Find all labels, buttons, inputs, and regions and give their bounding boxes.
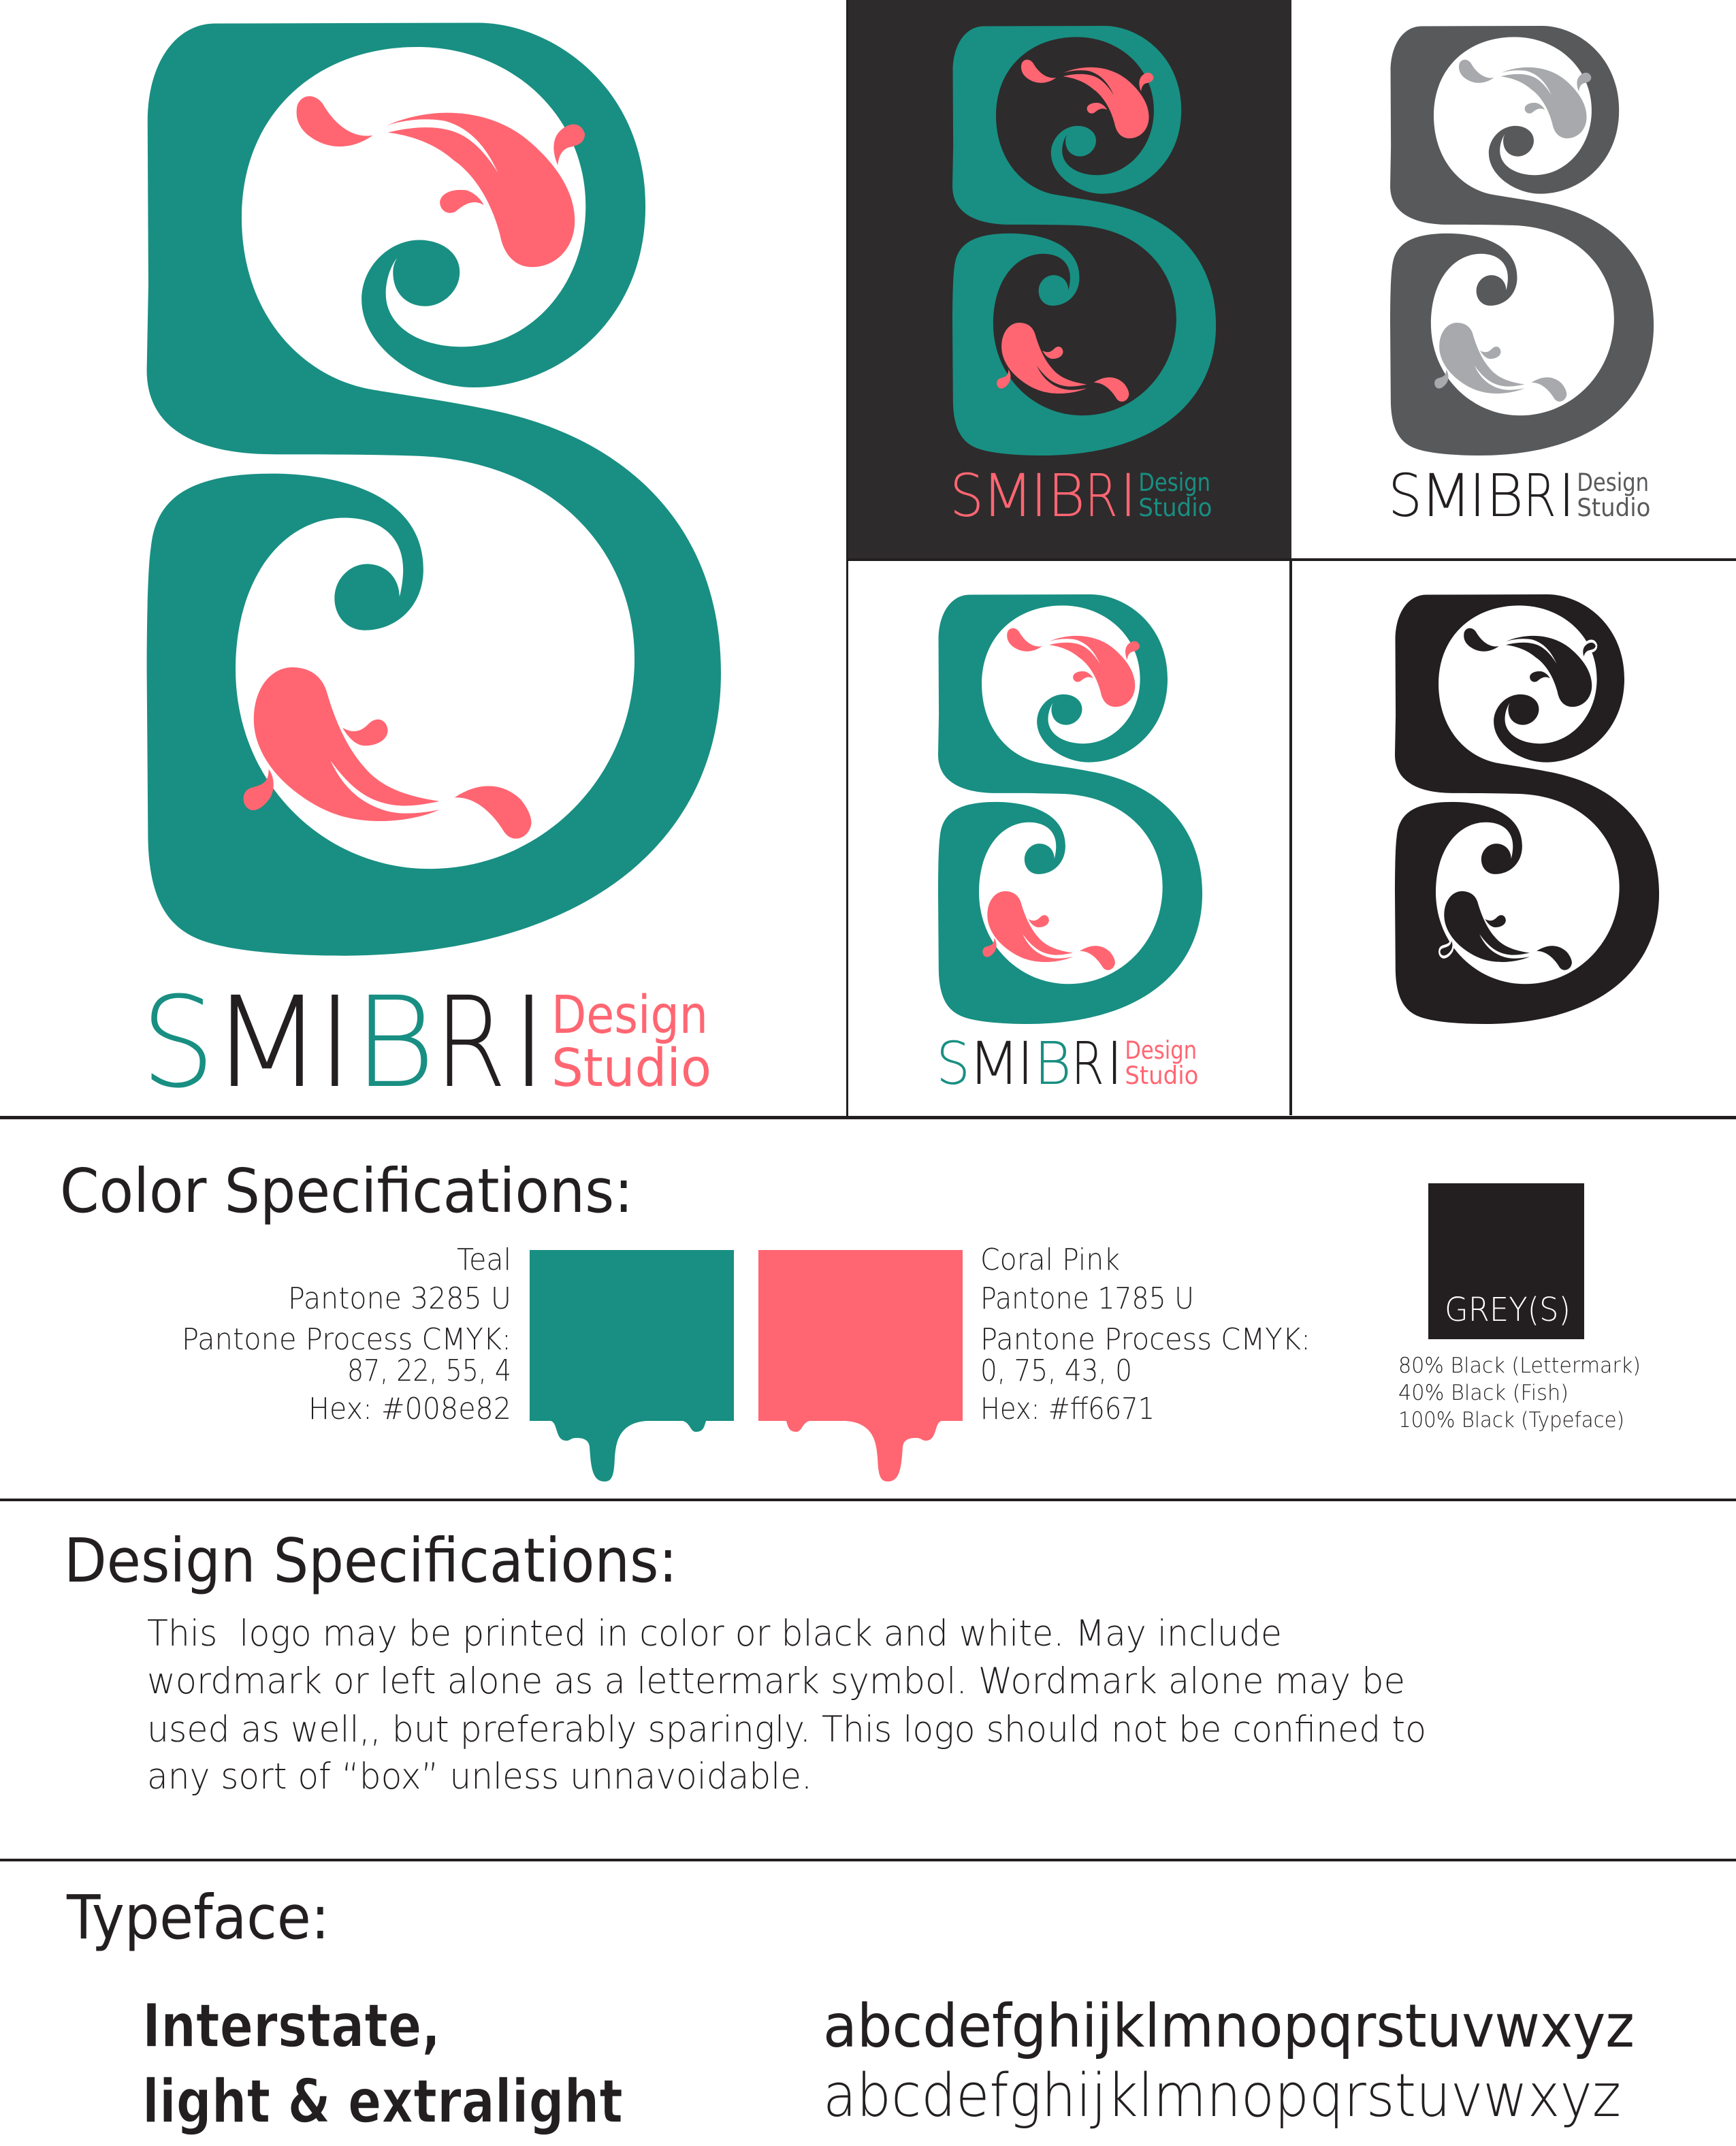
coral colour specification text: Pantone Process CMYK: [980,1322,1311,1357]
grey panel wordmark: Design [1577,469,1649,497]
grey swatch [1428,1183,1584,1339]
small teal wordmark: I [1106,1029,1123,1098]
small teal wordmark: M [967,1029,1020,1098]
alphabet samples: abcdefghijklmnopqrstuvwxyz [823,2061,1621,2130]
teal colour specification text: Hex: #008e82 [308,1392,511,1426]
panel: dark logo background [848,0,1291,560]
small teal wordmark [936,1029,1198,1098]
alphabet samples [823,1991,1635,2130]
small teal wordmark: S [936,1029,970,1098]
grey specification text: 80% Black (Lettermark) [1398,1354,1641,1378]
grey panel wordmark: B [1485,462,1524,530]
dark panel wordmark: I [1031,462,1047,530]
small teal wordmark: Studio [1125,1062,1198,1090]
heading: design specifications: Design Specifications: [64,1525,677,1596]
main wordmark: M [210,970,324,1116]
typeface name: Interstate, [142,1991,440,2061]
grey panel wordmark: I [1469,462,1485,530]
small teal wordmark: R [1071,1029,1104,1098]
grey swatch: GREY(S) [1445,1291,1571,1329]
coral colour specification text: 0, 75, 43, 0 [980,1354,1132,1388]
coral swatch with drips [758,1250,963,1482]
main teal and coral lettermark [147,22,721,956]
teal colour specification text [182,1243,511,1426]
dark panel wordmark: Studio [1138,494,1212,522]
grey panel wordmark: S [1388,462,1422,530]
main wordmark: R [434,970,507,1116]
main wordmark: Studio [551,1038,711,1099]
grey panel wordmark: I [1558,462,1575,530]
design specifications body text: wordmark or left alone as a lettermark symbol. Wordmark alone may be [147,1661,1405,1702]
dark panel wordmark [950,462,1212,530]
main wordmark: S [141,970,215,1116]
design specifications body text: This logo may be printed in color or black and white. May include [147,1613,1282,1654]
design specifications body text: used as well,, but preferably sparingly. This logo should not be confined to [147,1709,1426,1750]
coral colour specification text: Pantone 1785 U [980,1281,1194,1316]
grey panel wordmark: Studio [1577,494,1650,522]
main wordmark: Design [551,985,708,1046]
grey specification text [1398,1354,1641,1432]
dark panel wordmark: B [1047,462,1085,530]
small teal wordmark: I [1017,1029,1033,1098]
teal colour specification text: Teal [457,1243,511,1277]
grey lettermark [1390,26,1654,455]
dark panel lettermark [952,26,1216,455]
grey panel wordmark [1388,462,1650,530]
heading: typeface: Typeface: [66,1882,329,1953]
design specifications body text: any sort of “box” unless unnavoidable. [147,1756,812,1797]
main wordmark [141,970,711,1116]
coral colour specification text: Hex: #ff6671 [980,1392,1155,1426]
small teal wordmark: Design [1125,1037,1197,1065]
typeface name [142,1991,623,2136]
dark panel wordmark: R [1084,462,1118,530]
teal swatch with drips [530,1250,734,1482]
dark panel wordmark: S [950,462,984,530]
teal colour specification text: Pantone Process CMYK: [182,1322,511,1357]
grey panel wordmark: M [1419,462,1473,530]
grey panel wordmark: R [1523,462,1556,530]
dark panel wordmark: I [1120,462,1137,530]
main wordmark: I [317,970,353,1116]
heading: color specifications: Color Specifications: [60,1155,633,1226]
main wordmark: I [511,970,547,1116]
typeface name: light & extralight [142,2066,623,2136]
black lettermark [1395,594,1659,1024]
grey specification text: 100% Black (Typeface) [1398,1408,1624,1432]
teal colour specification text: Pantone 3285 U [288,1281,511,1316]
coral colour specification text: Coral Pink [980,1243,1120,1277]
main wordmark: B [353,970,436,1116]
design specifications body text [147,1613,1426,1797]
dark panel wordmark: Design [1138,469,1210,497]
small teal wordmark: B [1033,1029,1072,1098]
dark panel wordmark: M [981,462,1034,530]
grey specification text: 40% Black (Fish) [1398,1381,1569,1405]
teal colour specification text: 87, 22, 55, 4 [347,1354,511,1388]
alphabet samples: abcdefghijklmnopqrstuvwxyz [823,1991,1635,2061]
coral colour specification text [980,1243,1311,1426]
small teal lettermark [938,594,1202,1024]
